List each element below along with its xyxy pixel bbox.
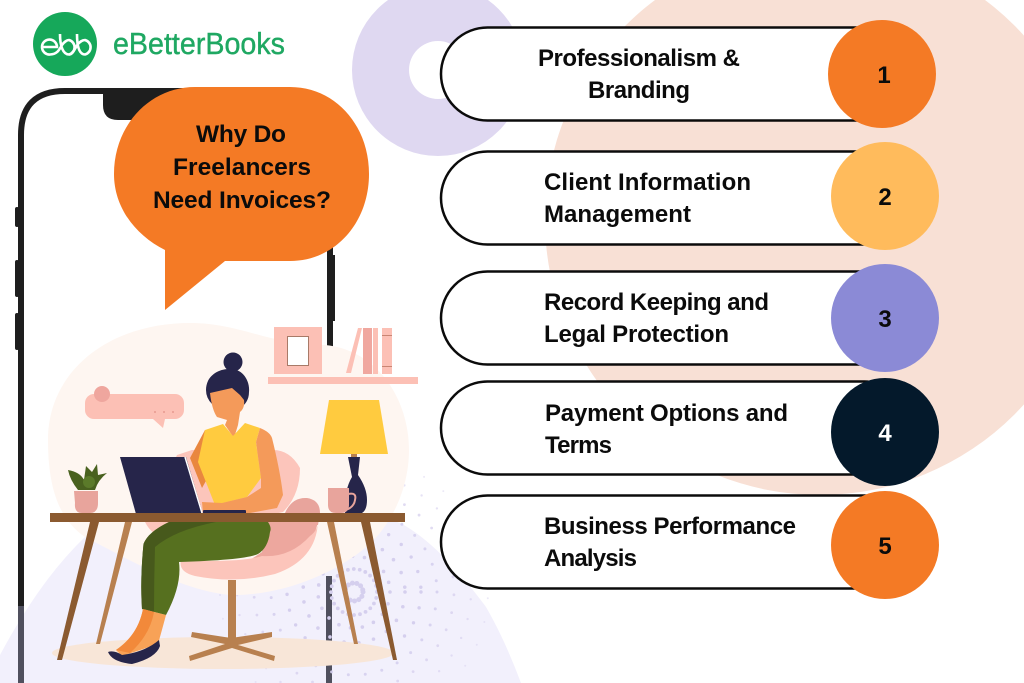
item 3: record keeping and legal protection: 3: [878, 306, 892, 333]
phone outline: [15, 88, 335, 683]
item 4: payment options and terms: 4: [878, 420, 892, 447]
item 5: business performance analysis: [441, 491, 939, 599]
small chat bubble: [85, 386, 184, 428]
item 5: business performance analysis: Analysis: [544, 545, 637, 572]
desk: [50, 513, 405, 660]
logo: eBetterBooks: [113, 26, 285, 61]
chair: [145, 450, 320, 661]
dimmed phone edges under the hill: [18, 576, 332, 683]
speech bubble heading: Need Invoices?: [153, 187, 331, 214]
item 3: record keeping and legal protection: [441, 264, 939, 372]
item 5: business performance analysis: Business Performance: [544, 513, 796, 540]
item 1: professionalism and branding: Branding: [588, 77, 690, 104]
item 2: client information management: 2: [878, 184, 892, 211]
item 3: record keeping and legal protection: Legal Protection: [544, 321, 729, 348]
logo: [33, 12, 285, 76]
speech bubble heading: Freelancers: [173, 154, 311, 181]
desk legs behind: [96, 522, 358, 644]
item 1: professionalism and branding: [441, 20, 936, 128]
background peach circle: [545, 0, 1024, 495]
plant: [68, 464, 107, 513]
pale blob behind the illustration: [48, 323, 409, 595]
background lavender ring: [352, 0, 524, 156]
woman: [108, 352, 283, 664]
item 4: payment options and terms: [441, 378, 939, 486]
rug: [52, 637, 394, 669]
table lamp: [320, 400, 388, 513]
shelf with frame and books: [268, 327, 418, 384]
item 3: record keeping and legal protection: Record Keeping and: [544, 289, 769, 316]
item 4: payment options and terms: Terms: [545, 432, 612, 459]
item 5: business performance analysis: 5: [878, 533, 892, 560]
concentric dot pattern: [220, 457, 488, 682]
item 1: professionalism and branding: Professionalism &: [538, 45, 740, 72]
item 1: professionalism and branding: 1: [877, 62, 891, 89]
speech bubble heading: [114, 87, 369, 310]
speech bubble heading: Why Do: [196, 121, 286, 148]
item 2: client information management: [441, 142, 939, 250]
coffee cup: [328, 488, 355, 513]
lavender hill background: [0, 500, 521, 683]
item 2: client information management: Management: [544, 201, 691, 228]
item 2: client information management: Client Information: [544, 169, 751, 196]
laptop: [120, 457, 246, 514]
item 4: payment options and terms: Payment Options and: [545, 400, 788, 427]
